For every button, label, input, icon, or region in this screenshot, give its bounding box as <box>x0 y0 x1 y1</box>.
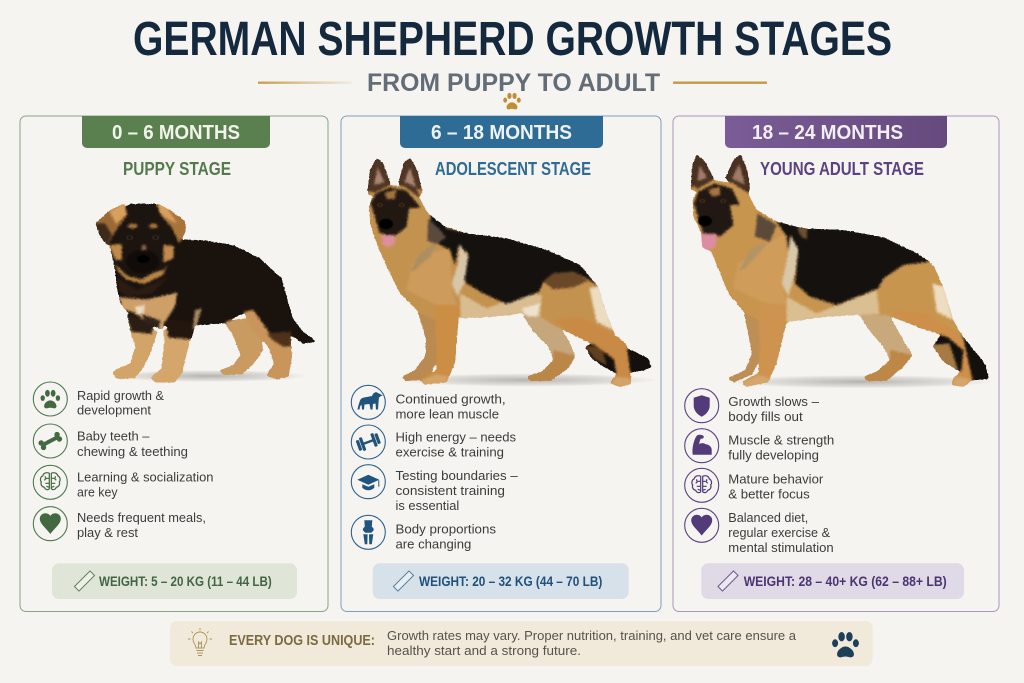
bullet: continued growth <box>351 385 506 421</box>
callout text: Growth rates may vary. Proper nutrition, training, and vet care ensure a <box>387 629 796 643</box>
left front leg <box>112 315 157 379</box>
icon: navy paw <box>832 632 859 657</box>
icon: gold paw <box>503 93 521 109</box>
icon: ruler <box>393 571 414 591</box>
black saddle <box>430 215 597 304</box>
bullet: high energy <box>351 425 516 460</box>
icon: dog <box>351 385 385 419</box>
bullet: body proportions <box>351 515 496 551</box>
black body and tail <box>110 210 317 344</box>
illustration: adolescent dog <box>367 157 657 387</box>
icon: ruler <box>718 571 738 591</box>
black saddle <box>777 222 929 305</box>
callout text <box>387 629 796 658</box>
shoulder <box>733 233 787 305</box>
bullet: balanced diet: mental stimulation <box>728 541 834 555</box>
shoulder <box>407 248 457 307</box>
hind highlight <box>589 287 613 330</box>
bullet: growth slows <box>685 389 819 424</box>
cream stripe <box>782 235 798 297</box>
far hind leg <box>859 310 913 381</box>
hind leg orange <box>887 310 972 387</box>
belly light <box>460 293 542 319</box>
bullet: continued growth: more lean muscle <box>396 407 499 421</box>
face mask <box>694 183 740 237</box>
far hind leg <box>219 318 263 375</box>
icon: brain <box>33 465 67 499</box>
bullet: baby teeth: chewing & teething <box>77 445 188 459</box>
age badge: 18-24 months <box>725 116 947 148</box>
weight pill: WEIGHT: 28 – 40+ KG (62 – 88+ LB) <box>744 574 947 589</box>
icon: heart <box>685 508 719 542</box>
weight pill <box>701 563 964 599</box>
bullet: balanced diet <box>685 508 834 555</box>
icon: dumbbell <box>351 425 385 459</box>
front leg orange <box>742 305 787 387</box>
bullet: high energy: High energy – needs <box>396 431 516 445</box>
bullet: meals: play & rest <box>77 526 139 540</box>
bullet: continued growth: Continued growth, <box>396 392 506 406</box>
ears <box>367 157 391 195</box>
age badge: 6-18 months <box>400 116 603 148</box>
main body <box>369 200 631 387</box>
stage heading: PUPPY STAGE <box>123 159 231 179</box>
tongue <box>701 233 717 251</box>
weight pill <box>52 563 297 599</box>
weight pill: WEIGHT: 5 – 20 KG (11 – 44 LB) <box>99 574 272 589</box>
bullet: balanced diet: Balanced diet, <box>728 511 808 525</box>
muzzle <box>126 250 159 273</box>
hind leg orange <box>553 317 631 387</box>
left ear <box>95 203 127 245</box>
panel: adolescent stage <box>341 116 661 612</box>
age badge: 18-24 months: 18 – 24 MONTHS <box>752 121 903 144</box>
bullet: muscle: Muscle & strength <box>728 433 834 447</box>
chest <box>119 293 177 330</box>
weight pill: WEIGHT: 20 – 32 KG (44 – 70 LB) <box>419 574 602 589</box>
bullet: mature behavior: & better focus <box>728 488 810 502</box>
head <box>693 180 777 252</box>
bullet: rapid growth: development <box>77 404 152 418</box>
bullet: learning <box>33 465 214 500</box>
bullet: growth slows: Growth slows – <box>728 395 819 409</box>
bullet: meals <box>33 507 206 541</box>
bullet: testing boundaries <box>351 465 518 513</box>
cream stripe <box>452 244 468 297</box>
subtitle: FROM PUPPY TO ADULT <box>367 69 660 97</box>
icon: graduation cap <box>351 465 385 499</box>
bullet: testing boundaries: consistent training <box>396 484 505 498</box>
stage heading: YOUNG ADULT STAGE <box>760 159 924 179</box>
bullet: learning: Learning & socialization <box>77 471 214 485</box>
weight pill <box>373 563 629 599</box>
illustration: puppy <box>95 203 317 383</box>
icon: flexed arm <box>685 429 719 463</box>
age badge: 0-6 months <box>82 116 270 148</box>
main body <box>693 197 972 387</box>
head <box>107 204 175 275</box>
bullet: meals: Needs frequent meals, <box>77 511 206 525</box>
front leg orange <box>421 305 459 385</box>
footer callout: EVERY DOG IS UNIQUE: <box>229 633 375 649</box>
bullet: muscle <box>685 429 834 463</box>
right ear <box>157 203 186 243</box>
bullet: baby teeth <box>33 424 188 459</box>
icon: ruler <box>74 571 95 591</box>
panel: young adult stage <box>673 116 999 612</box>
bullet: muscle: fully developing <box>728 448 819 462</box>
ears <box>691 154 714 192</box>
far hind leg <box>523 315 576 381</box>
callout text: healthy start and a strong future. <box>387 644 581 658</box>
belly light <box>787 290 879 322</box>
far front leg <box>402 310 438 381</box>
panel: puppy stage <box>20 116 328 612</box>
bullet: rapid growth <box>33 382 165 418</box>
far front leg <box>728 313 763 383</box>
tail <box>585 337 651 375</box>
icon: brain <box>685 468 719 502</box>
icon: shield <box>685 389 719 423</box>
stage heading: ADOLESCENT STAGE <box>435 159 591 179</box>
hind highlight <box>933 283 953 320</box>
cheeks <box>109 244 122 261</box>
hip brown <box>543 272 588 289</box>
bullet: learning: are key <box>77 486 118 500</box>
icon: knee joint <box>351 515 385 549</box>
head <box>369 185 428 257</box>
bullet: balanced diet: regular exercise & <box>728 526 831 540</box>
age badge: 0-6 months: 0 – 6 MONTHS <box>112 121 240 144</box>
bullet: testing boundaries: is essential <box>396 499 459 513</box>
bullet: baby teeth: Baby teeth – <box>77 430 150 444</box>
icon: heart <box>33 507 67 541</box>
tongue <box>381 235 395 248</box>
bullet: body proportions: are changing <box>396 537 471 551</box>
bullet: mature behavior <box>685 468 823 502</box>
illustration: young adult dog <box>691 154 993 388</box>
brows <box>128 224 138 228</box>
bullet: rapid growth: Rapid growth & <box>77 389 165 403</box>
dog face details <box>698 199 726 226</box>
face mask <box>371 187 421 237</box>
dog face details <box>377 203 405 229</box>
neck ruff <box>117 277 168 297</box>
bullet: mature behavior: Mature behavior <box>728 473 823 487</box>
icon: paw <box>33 382 67 416</box>
bullet: testing boundaries: Testing boundaries – <box>396 469 518 483</box>
footer callout <box>170 621 873 666</box>
icon: light bulb <box>188 628 212 656</box>
tail <box>933 320 989 380</box>
near hind leg <box>244 310 292 380</box>
puppy face details <box>126 235 159 263</box>
bullet: high energy: exercise & training <box>396 446 504 460</box>
bullet: body proportions: Body proportions <box>396 522 496 536</box>
bullet: growth slows: body fills out <box>728 410 803 424</box>
icon: bone <box>33 424 67 458</box>
right front leg <box>150 323 193 383</box>
age badge: 6-18 months: 6 – 18 MONTHS <box>431 121 572 144</box>
